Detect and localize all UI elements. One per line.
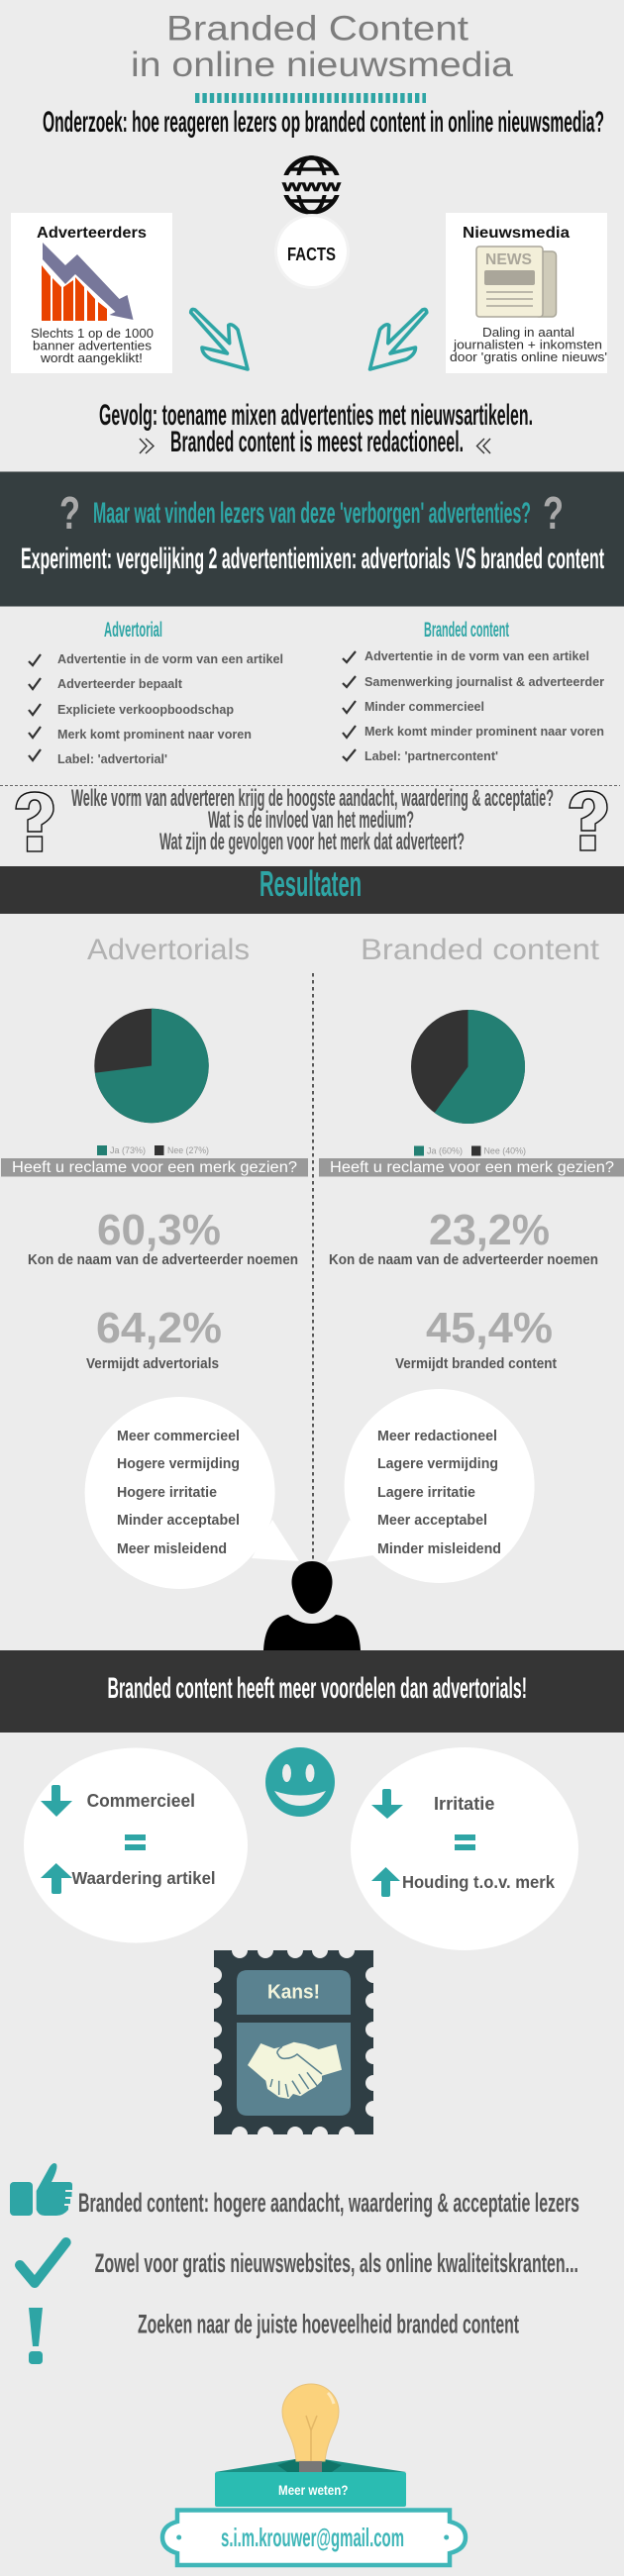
legend: advertorials: Ja (73%) <box>110 1145 146 1155</box>
icon: question mark right: ? <box>543 487 564 539</box>
button: meer weten <box>215 2472 406 2507</box>
check marks <box>29 654 41 760</box>
legend: branded content <box>414 1146 526 1156</box>
speech bubble: branded content: Minder misleidend <box>377 1541 501 1557</box>
stat: 23,2% <box>329 1206 598 1268</box>
pie caption: advertorials: Heeft u reclame voor een merk gezien? <box>12 1159 297 1176</box>
stat: 23,2%: Kon de naam van de adverteerder noemen <box>329 1252 598 1268</box>
title: Branded Content <box>166 10 468 48</box>
stat: 60,3%: Kon de naam van de adverteerder noemen <box>28 1252 298 1268</box>
icon: outlined question mark left <box>16 792 53 851</box>
icon: arrow down <box>371 1789 403 1819</box>
title underline <box>195 93 426 103</box>
icon: person <box>263 1561 361 1650</box>
text: journalists decline <box>450 325 607 364</box>
stat: 64,2%: 64,2% <box>96 1304 222 1352</box>
circle: commercieel: Commercieel <box>87 1791 195 1811</box>
circle: commercieel: Waardering artikel <box>71 1868 216 1888</box>
panel: nieuwsmedia <box>446 213 607 373</box>
icon: handshake <box>248 2042 342 2099</box>
heading: resultaten: Resultaten <box>260 863 362 904</box>
pie chart: branded content <box>411 1010 525 1124</box>
speech bubble: advertorials: Hogere vermijding <box>117 1456 240 1472</box>
icon: newspaper: NEWS <box>485 251 532 268</box>
icon: arrow up <box>41 1863 72 1894</box>
icon: kans stamp: Kans! <box>267 1982 320 2004</box>
column heading: advertorials: Advertorials <box>87 934 250 966</box>
speech bubble: branded content: Lagere vermijding <box>377 1456 498 1472</box>
stat: 23,2%: 23,2% <box>429 1206 550 1254</box>
panel: conclusion banner <box>0 1650 624 1733</box>
panel: adverteerders <box>11 213 172 373</box>
stat: 45,4%: 45,4% <box>426 1304 553 1352</box>
icon: chevrons right <box>477 439 490 453</box>
list items: Advertentie in de vorm van een artikel <box>57 652 283 666</box>
heading: nieuwsmedia: Nieuwsmedia <box>463 225 570 242</box>
icon: chevrons left <box>140 439 154 453</box>
research questions <box>71 785 554 855</box>
circle: irritatie: Houding t.o.v. merk <box>402 1872 555 1892</box>
contact ticket: s.i.m.krouwer@gmail.com <box>221 2523 404 2552</box>
list items: Advertentie in de vorm van een artikel <box>364 649 589 663</box>
speech bubble: branded content: Meer acceptabel <box>377 1513 487 1529</box>
text: journalists decline: door 'gratis online nieuws' <box>450 349 607 364</box>
speech bubble: advertorials <box>85 1397 299 1589</box>
list items <box>57 652 283 766</box>
text: banner clicks <box>31 326 154 365</box>
list items: Minder commercieel <box>364 700 484 714</box>
speech bubble: branded content <box>327 1389 535 1583</box>
column heading: branded content: Branded content <box>361 934 600 966</box>
legend: branded content: Nee (40%) <box>483 1146 526 1156</box>
button: meer weten: Meer weten? <box>278 2482 349 2498</box>
panel: results banner <box>0 863 624 914</box>
teal flap <box>215 2459 406 2472</box>
text: banner clicks: banner advertenties <box>33 339 153 352</box>
conclusion text <box>99 399 533 458</box>
panel: experiment banner <box>0 471 624 607</box>
text: banner clicks: wordt aangeklikt! <box>40 350 143 365</box>
pie chart: advertorials <box>94 1009 209 1123</box>
legend: branded content: Ja (60%) <box>427 1146 463 1156</box>
icon: arrow up <box>371 1867 400 1897</box>
speech bubble: advertorials: Meer commercieel <box>117 1429 240 1444</box>
pie caption: branded content: Heeft u reclame voor een merk gezien? <box>330 1159 614 1176</box>
legend: advertorials <box>97 1145 209 1155</box>
speech bubble: branded content: Meer redactioneel <box>377 1429 497 1444</box>
stat: 60,3%: 60,3% <box>97 1206 221 1254</box>
icon: outlined question mark right <box>570 791 607 850</box>
stat: 45,4%: Vermijdt branded content <box>395 1356 557 1372</box>
contact block <box>162 2384 466 2565</box>
stat: 60,3% <box>28 1206 298 1268</box>
icon: thumbs up <box>10 2163 72 2216</box>
list items: Expliciete verkoopboodschap <box>57 703 234 717</box>
arrow: right to centre <box>370 309 427 369</box>
list items: Adverteerder bepaalt <box>57 677 183 691</box>
circle: irritatie: Irritatie <box>434 1794 494 1814</box>
list: advertorial <box>29 619 283 766</box>
list items: Merk komt minder prominent naar voren <box>364 725 604 739</box>
facts circle <box>274 214 350 289</box>
legend: advertorials: Nee (27%) <box>167 1145 209 1155</box>
title: in online nieuwsmedia <box>131 46 514 84</box>
icon: equals <box>125 1837 146 1847</box>
list items <box>364 649 604 763</box>
list items: Label: 'partnercontent' <box>364 749 498 763</box>
icon: question mark left: ? <box>59 487 80 539</box>
speech bubble: advertorials: Minder acceptabel <box>117 1513 240 1529</box>
icon: smiley <box>265 1747 335 1817</box>
stat: 64,2% <box>86 1304 222 1372</box>
list items: Samenwerking journalist & adverteerder <box>364 675 604 689</box>
speech bubble: advertorials: Hogere irritatie <box>117 1485 217 1501</box>
icon: light bulb <box>282 2384 339 2473</box>
icon: newspaper <box>476 247 557 317</box>
research questions: Wat is de invloed van het medium? <box>208 807 414 834</box>
icon: www globe: www <box>280 178 342 195</box>
icon: exclamation mark <box>29 2308 43 2364</box>
list items: Label: 'advertorial' <box>57 752 167 766</box>
icon: www globe <box>279 157 345 213</box>
facts circle: FACTS <box>287 245 336 264</box>
icon: kans stamp <box>206 1942 381 2142</box>
icon: arrow down <box>41 1785 72 1817</box>
speech bubble: advertorials: Meer misleidend <box>117 1541 227 1557</box>
check marks <box>343 651 356 760</box>
title <box>131 10 514 84</box>
list items: Merk komt prominent naar voren <box>57 728 252 742</box>
heading: advertorial: Advertorial <box>104 619 162 642</box>
circle: commercieel <box>24 1748 248 1942</box>
heading: adverteerders: Adverteerders <box>37 225 147 242</box>
stat: 45,4% <box>395 1304 557 1372</box>
stat: 64,2%: Vermijdt advertorials <box>86 1356 219 1372</box>
list: branded content <box>343 619 604 763</box>
arrow: left to centre <box>191 309 248 369</box>
text: journalists decline: journalisten + inkomsten <box>453 337 602 352</box>
circle: irritatie <box>351 1747 578 1950</box>
icon: equals <box>455 1837 475 1847</box>
speech bubble: branded content: Lagere irritatie <box>377 1485 475 1501</box>
contact ticket <box>162 2511 466 2565</box>
icon: check mark <box>20 2242 66 2283</box>
heading: branded content: Branded content <box>424 619 509 642</box>
icon: falling bar chart <box>42 243 133 321</box>
text: banner clicks: Slechts 1 op de 1000 <box>31 326 154 341</box>
text: journalists decline: Daling in aantal <box>482 325 574 340</box>
